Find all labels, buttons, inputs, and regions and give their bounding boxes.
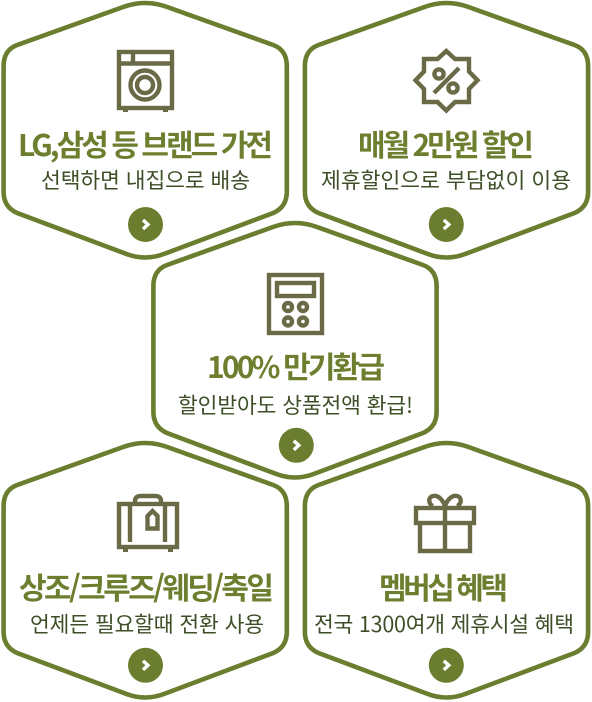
panel: membership benefits: [305, 443, 588, 698]
subtext: 언제든 필요할때 전환 사용: [30, 608, 264, 639]
heading: LG,삼성 등 브랜드 가전: [18, 121, 273, 165]
button: arrow: [128, 207, 163, 242]
panel: LG, Samsung appliances: [4, 3, 287, 258]
panel: funeral, cruise, wedding, celebration: [4, 443, 287, 698]
button: arrow: [279, 428, 314, 463]
icon: percent badge: [416, 51, 478, 110]
icon: suitcase with tag: [119, 496, 177, 552]
panel: full refund at maturity: [153, 223, 437, 478]
button: arrow: [429, 648, 464, 683]
subtext: 선택하면 내집으로 배송: [41, 164, 250, 195]
button: arrow: [429, 207, 464, 242]
button: arrow: [128, 648, 163, 683]
panel: monthly discount: [305, 3, 588, 258]
subtext: 할인받아도 상품전액 환급!: [178, 389, 413, 420]
icon: gift box: [416, 496, 474, 551]
heading: 멤버십 혜택: [379, 564, 508, 608]
subtext: 제휴할인으로 부담없이 이용: [321, 164, 571, 195]
subtext: 전국 1300여개 제휴시설 혜택: [314, 608, 574, 639]
heading: 상조/크루즈/웨딩/축일: [19, 564, 274, 608]
icon: washing machine: [119, 52, 172, 112]
icon: calculator: [269, 275, 322, 333]
heading: 매월 2만원 할인: [358, 121, 534, 165]
heading: 100% 만기환급: [207, 343, 385, 387]
